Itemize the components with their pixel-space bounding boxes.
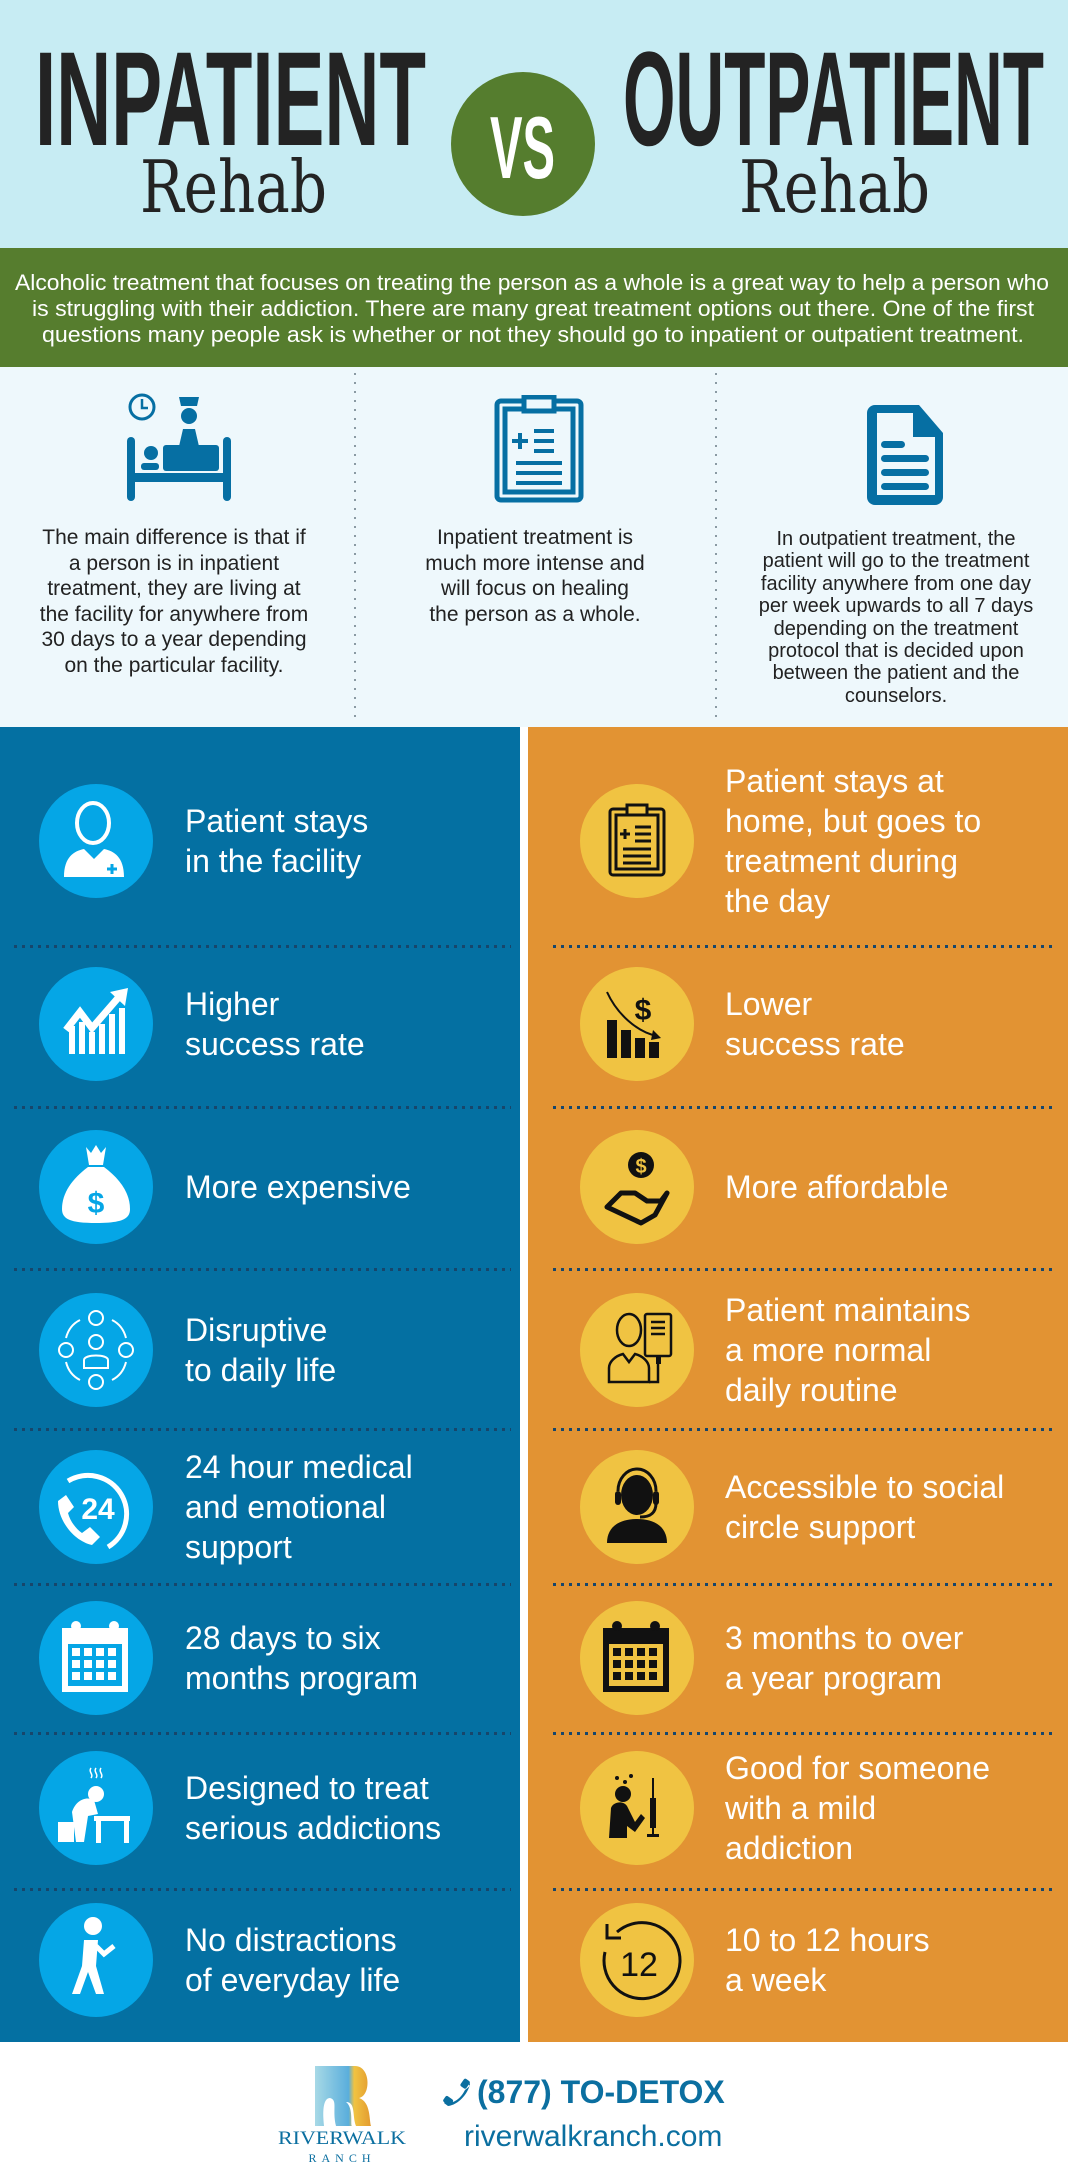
intro band: Alcoholic treatment that focuses on treating the person as a whole is a great way to help a person who	[15, 270, 1049, 295]
text: main difference: The main difference is that if	[42, 526, 306, 549]
text: 10 to 12 hours: 10 to 12 hours	[725, 1922, 930, 1958]
text: disruptive: Disruptive	[185, 1312, 327, 1348]
text: 3 months: 3 months to over	[725, 1620, 963, 1656]
text: lower success	[725, 986, 905, 1062]
icon: money bag	[39, 1130, 153, 1244]
text: outpatient schedule: patient will go to the treatment	[763, 550, 1029, 572]
text: outpatient schedule: counselors.	[845, 685, 947, 707]
intro band: questions many people ask is whether or not they should go to inpatient or outpatient treatment.	[42, 322, 1024, 347]
vs circle: VS	[490, 98, 555, 197]
text: outpatient schedule: facility anywhere from one day	[761, 573, 1031, 595]
text: normal routine: a more normal	[725, 1332, 931, 1368]
title: inpatient: INPATIENT	[35, 25, 426, 174]
panel: overview	[0, 367, 1068, 727]
intro band	[0, 248, 1068, 367]
icon: clipboard	[494, 395, 584, 502]
icon: bed with nurse	[127, 394, 231, 501]
text: 24 hour support	[185, 1449, 413, 1565]
icon: money bag: $	[88, 1187, 105, 1220]
icon: person at desk	[39, 1751, 153, 1865]
text: 24 hour support: and emotional	[185, 1489, 386, 1525]
text: inpatient intense: much more intense and	[425, 552, 645, 574]
text: main difference: on the particular facility.	[64, 654, 284, 676]
title: inpatient	[35, 25, 426, 229]
text: patient stays at home: Patient stays at	[725, 763, 944, 799]
text: 24 hour support: 24 hour medical	[185, 1449, 413, 1485]
text: 28 days: months program	[185, 1660, 418, 1696]
text: more expensive: More expensive	[185, 1169, 411, 1205]
intro band: is struggling with their addiction. There are many great treatment options out there. One of the first	[32, 296, 1034, 321]
text: disruptive	[185, 1312, 336, 1388]
text: outpatient schedule	[759, 528, 1033, 707]
icon: declining dollar chart	[580, 967, 694, 1081]
title: outpatient: Rehab	[739, 145, 930, 229]
text: outpatient schedule: depending on the treatment	[774, 618, 1018, 640]
icon: patient	[39, 784, 153, 898]
text: patient stays at home: home, but goes to	[725, 803, 981, 839]
text: inpatient intense	[425, 526, 645, 626]
text: higher success	[185, 986, 365, 1062]
icon: walking person	[39, 1903, 153, 2017]
text: lower success: Lower	[725, 986, 812, 1022]
icon: hand with coin: $	[635, 1156, 647, 1178]
icon: person with syringe	[580, 1751, 694, 1865]
text: mild addiction: with a mild	[725, 1790, 876, 1826]
text: 28 days	[185, 1620, 418, 1696]
text: designed to treat: serious addictions	[185, 1810, 441, 1846]
icon: 24 hour	[39, 1450, 153, 1564]
text: more affordable: More affordable	[725, 1169, 949, 1205]
text: main difference: treatment, they are living at	[47, 577, 301, 600]
text: main difference	[40, 526, 308, 676]
text: designed to treat	[185, 1770, 441, 1846]
text: mild addiction: Good for someone	[725, 1750, 990, 1786]
phone number: (877) TO-DETOX	[477, 2074, 725, 2110]
icon: clock 12: 12	[620, 1946, 658, 1984]
text: patient stays in facility: Patient stays	[185, 803, 368, 839]
panel: outpatient column	[528, 727, 1068, 2042]
text: lower success: success rate	[725, 1026, 905, 1062]
text: social circle: Accessible to social	[725, 1469, 1004, 1505]
icon: 24 hour: 24	[81, 1493, 115, 1526]
footer	[0, 2042, 1068, 2176]
text: mild addiction	[725, 1750, 990, 1866]
text: social circle	[725, 1469, 1004, 1545]
text: patient stays in facility	[185, 803, 368, 879]
text: 24 hour support: support	[185, 1529, 292, 1565]
header	[0, 0, 1068, 248]
icon: calendar outpatient	[580, 1601, 694, 1715]
icon: clipboard outpatient	[580, 784, 694, 898]
text: inpatient intense: will focus on healing	[441, 577, 629, 600]
icon: declining dollar chart: $	[635, 994, 652, 1027]
icon: headset person	[580, 1450, 694, 1564]
text: no distractions: No distractions	[185, 1922, 397, 1958]
panel: inpatient column	[0, 727, 520, 2042]
text: 10 to 12 hours	[725, 1922, 930, 1998]
icon: patient with drip	[580, 1293, 694, 1407]
logo	[278, 2066, 406, 2165]
logo: RANCH	[308, 2151, 376, 2165]
text: 28 days: 28 days to six	[185, 1620, 381, 1656]
logo: RIVERWALK	[278, 2128, 406, 2149]
text: patient stays at home: the day	[725, 883, 830, 919]
text: outpatient schedule: In outpatient treatment, the	[776, 528, 1016, 550]
text: patient stays at home	[725, 763, 981, 919]
text: designed to treat: Designed to treat	[185, 1770, 429, 1806]
text: outpatient schedule: protocol that is decided upon	[768, 640, 1024, 662]
text: no distractions: of everyday life	[185, 1962, 400, 1998]
text: main difference: 30 days to a year depending	[41, 628, 307, 651]
text: patient stays at home: treatment during	[725, 843, 958, 879]
icon: document	[867, 405, 943, 505]
vs circle	[451, 72, 595, 216]
icon: growth chart	[39, 967, 153, 1081]
website: riverwalkranch.com	[464, 2120, 722, 2153]
text: outpatient schedule: per week upwards to all 7 days	[759, 595, 1033, 617]
text: mild addiction: addiction	[725, 1830, 853, 1866]
text: 10 to 12 hours: a week	[725, 1962, 826, 1998]
icon: calendar	[39, 1601, 153, 1715]
text: main difference: a person is in inpatient	[69, 552, 279, 574]
title: inpatient: Rehab	[140, 145, 327, 229]
text: 3 months	[725, 1620, 963, 1696]
text: normal routine: Patient maintains	[725, 1292, 970, 1328]
text: social circle: circle support	[725, 1509, 915, 1545]
text: higher success: success rate	[185, 1026, 365, 1062]
icon: disruptive cycle	[39, 1293, 153, 1407]
text: patient stays in facility: in the facility	[185, 843, 361, 879]
text: normal routine: daily routine	[725, 1372, 898, 1408]
text: disruptive: to daily life	[185, 1352, 336, 1388]
text: outpatient schedule: between the patient and the	[773, 662, 1019, 684]
text: inpatient intense: the person as a whole.	[429, 602, 641, 626]
text: inpatient intense: Inpatient treatment is	[437, 526, 633, 549]
icon: hand with coin	[580, 1130, 694, 1244]
text: normal routine	[725, 1292, 970, 1408]
text: higher success: Higher	[185, 986, 279, 1022]
icon: clock 12	[580, 1903, 694, 2017]
text: no distractions	[185, 1922, 400, 1998]
text: main difference: the facility for anywhere from	[40, 602, 308, 626]
text: 3 months: a year program	[725, 1660, 942, 1696]
